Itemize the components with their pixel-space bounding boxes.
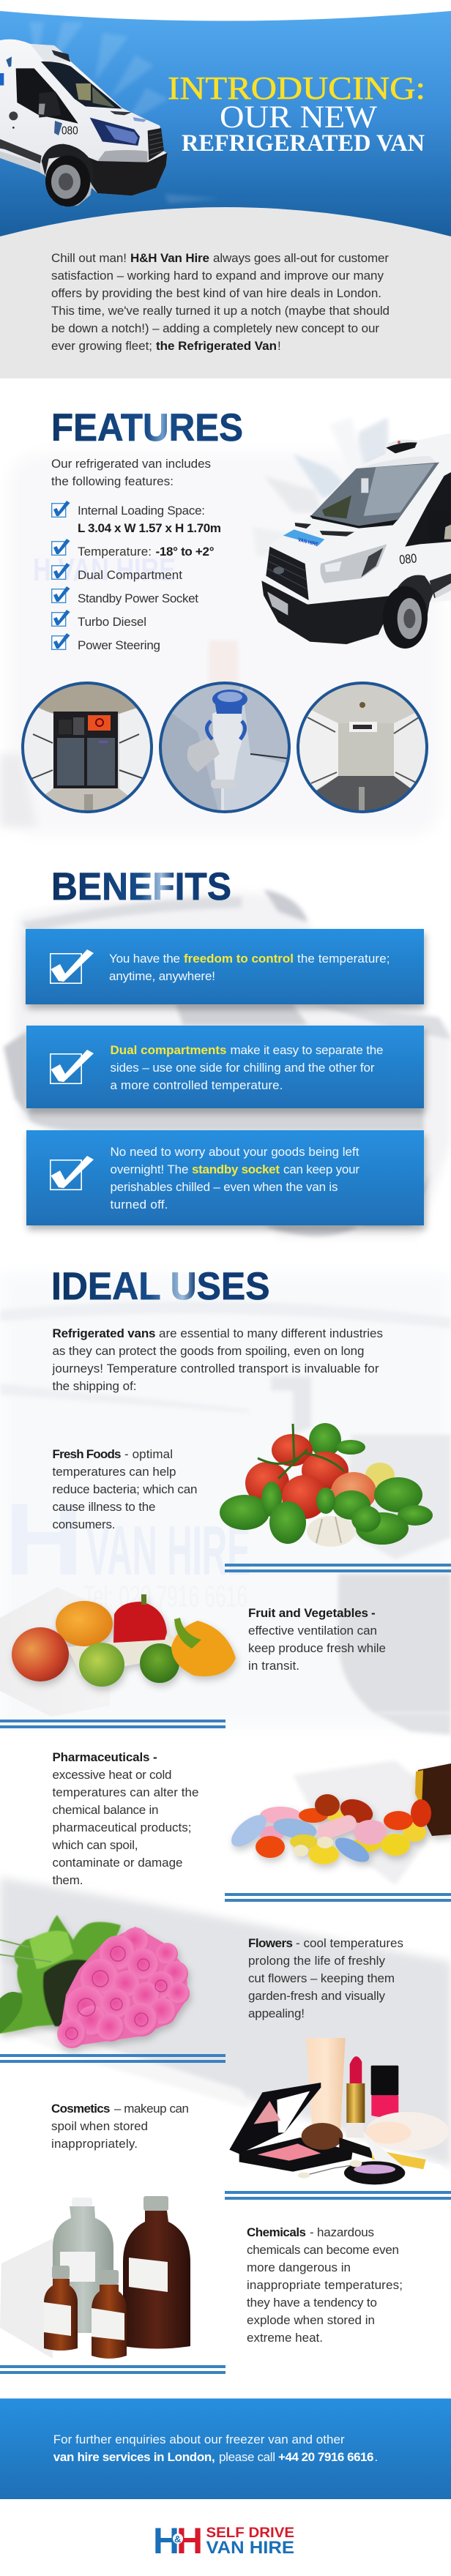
text: chemicals: inappropriate temperatures; [247, 2278, 403, 2292]
van photo [261, 433, 451, 649]
text: chemicals: chemicals can become even [247, 2243, 399, 2257]
text: fresh foods: temperatures can help [53, 1465, 176, 1479]
logo: H&H Self Drive Van Hire [153, 2520, 294, 2561]
text: flowers: appealing! [248, 2006, 305, 2020]
heading: ideal uses: IDEAL USES [51, 1265, 269, 1308]
benefit card 1: the temperature; [297, 952, 390, 966]
header panel [0, 0, 451, 378]
panel: features [22, 406, 451, 816]
title: REFRIGERATED VAN [182, 130, 425, 157]
photo: fruit and peppers [12, 1594, 236, 1687]
text: chemicals: more dangerous in [247, 2260, 351, 2274]
text: pharmaceuticals: which can spoil, [51, 1838, 138, 1852]
text: fresh foods [53, 1447, 198, 1531]
intro text: ! [277, 339, 281, 353]
text: fruit and vegetables: effective ventilation can [248, 1624, 377, 1638]
logo: H&H Self Drive Van Hire: H [176, 2520, 203, 2561]
benefit card 1 [26, 929, 424, 1004]
grey intro panel [0, 207, 451, 378]
background: faint blurred van watermark: Tel: 020 7916 6616 [83, 1579, 247, 1613]
text: flowers: Flowers [248, 1936, 293, 1950]
photo: empty cargo interior [297, 681, 428, 816]
text: fruit and vegetables: - [371, 1606, 376, 1620]
divider lines [0, 2365, 225, 2374]
photo: standby power socket [157, 681, 293, 816]
ideal uses intro text: Refrigerated vans [53, 1326, 155, 1340]
benefit card 3: overnight! The [110, 1162, 189, 1176]
ideal uses intro text: the shipping of: [53, 1379, 136, 1393]
text: fresh foods: Fresh Foods [53, 1447, 122, 1461]
title: OUR NEW [220, 100, 377, 135]
text: cosmetics: Cosmetics [51, 2102, 110, 2116]
photo ring 1 [23, 683, 152, 812]
benefit card 2: Dual compartments [110, 1043, 227, 1057]
benefit card 2 [26, 1026, 424, 1108]
divider lines [0, 1720, 225, 1728]
text: cosmetics: inappropriately. [51, 2137, 138, 2151]
intro text [51, 251, 390, 353]
background: faint blurred van watermark [0, 454, 451, 2359]
benefit card 3 [26, 1130, 424, 1225]
divider lines [225, 1893, 451, 1902]
background: faint blurred van watermark: H VAN HIRE [33, 552, 176, 588]
text: chemicals: extreme heat. [247, 2331, 323, 2345]
photo ring 3 [298, 683, 427, 812]
feature checklist: L 3.04 x W 1.57 x H 1.70m [78, 521, 221, 535]
intro text: always goes all-out for customer [213, 251, 389, 265]
text: cosmetics: spoil when stored [51, 2119, 148, 2133]
ideal uses intro text [51, 1326, 383, 1393]
text: chemicals: - hazardous [310, 2225, 374, 2239]
light rays [29, 22, 220, 245]
text: fresh foods: cause illness to the [53, 1500, 155, 1514]
feature checklist: Power Steering [78, 638, 160, 652]
text: chemicals: they have a tendency to [247, 2296, 377, 2310]
feature checklist: Standby Power Socket [78, 591, 198, 605]
text: pharmaceuticals: Pharmaceuticals [53, 1750, 149, 1764]
footer call-to-action band: For further enquiries about our freezer van and other [53, 2433, 345, 2446]
text: fresh foods: reduce bacteria; which can [53, 1482, 198, 1496]
intro text: offers by providing the best kind of van hire deals in London. [51, 286, 381, 300]
text: pharmaceuticals: excessive heat or cold [53, 1768, 171, 1782]
text: cosmetics: – makeup can [114, 2102, 189, 2116]
text: pharmaceuticals: chemical balance in [53, 1803, 158, 1817]
logo: H&H Self Drive Van Hire: & [174, 2534, 181, 2545]
logo: H&H Self Drive Van Hire: SELF DRIVE [206, 2525, 294, 2541]
benefit card 1: You have the [109, 952, 180, 966]
text: flowers [248, 1936, 403, 2020]
text: pharmaceuticals: them. [53, 1873, 83, 1887]
benefit card 1: freedom to control [184, 952, 294, 966]
text: fruit and vegetables: Fruit and Vegetables [248, 1606, 368, 1620]
heading: features: FEATURES [51, 406, 243, 449]
intro text: be down a notch!) – adding a completely new concept to our [51, 321, 379, 335]
footer call-to-action band: . [375, 2450, 378, 2464]
van photo [0, 40, 168, 206]
panel: ideal uses [0, 1265, 451, 2374]
text: chemicals: explode when stored in [247, 2313, 375, 2327]
van photo: VAN HIRE [297, 537, 319, 548]
divider lines [225, 2191, 451, 2200]
intro text: This time, we've really turned it up a notch (maybe that should [51, 304, 390, 318]
ideal uses intro text: as they can protect the goods from spoiling, even on long [53, 1344, 365, 1358]
intro text: satisfaction – working hard to expand and improve our many [51, 269, 384, 283]
icon: checkbox [51, 1156, 94, 1190]
background: faint blurred van watermark: VAN HIRE [86, 1512, 250, 1590]
text: fruit and vegetables: in transit. [248, 1659, 299, 1673]
feature checklist [52, 501, 221, 652]
photo: cosmetics [229, 2038, 449, 2189]
panel: benefits [26, 865, 424, 1225]
benefit card 2: a more controlled temperature. [110, 1078, 283, 1092]
feature checklist: Turbo Diesel [78, 615, 146, 629]
footer call-to-action band: +44 20 7916 6616 [278, 2450, 373, 2464]
photo ring 2 [160, 683, 289, 812]
ideal uses intro text: journeys! Temperature controlled transport is invaluable for [51, 1362, 379, 1375]
icon: checkbox [51, 1050, 94, 1083]
features intro text: Our refrigerated van includes [51, 457, 211, 471]
feature checklist: Temperature: [78, 545, 152, 559]
benefit card 2: make it easy to separate the [230, 1043, 384, 1057]
benefit card 3: perishables chilled – even when the van is [110, 1180, 338, 1194]
ideal uses intro text: are essential to many different industries [159, 1326, 383, 1340]
photo: tomatoes and basil [220, 1423, 433, 1547]
icon: checkbox [51, 949, 94, 983]
benefit card 3: turned off. [110, 1198, 168, 1212]
intro text: H&H Van Hire [130, 251, 209, 265]
heading: benefits: BENEFITS [51, 865, 231, 908]
photo: dual compartment interior [22, 681, 154, 816]
benefit card 1: anytime, anywhere! [109, 969, 215, 983]
divider lines [225, 1564, 451, 1572]
features intro text: the following features: [51, 474, 174, 488]
text: flowers: cut flowers – keeping them [248, 1971, 395, 1985]
text: flowers: - cool temperatures [296, 1936, 403, 1950]
text: cosmetics [51, 2102, 189, 2151]
benefit card 2: sides – use one side for chilling and the other for [110, 1061, 375, 1075]
logo: H&H Self Drive Van Hire: VAN HIRE [206, 2538, 294, 2558]
title [168, 70, 425, 157]
benefit card 3: standby socket [192, 1162, 280, 1176]
feature checklist: Internal Loading Space: [78, 504, 205, 518]
title: INTRODUCING: [168, 70, 425, 106]
text: pharmaceuticals: - [153, 1750, 157, 1764]
text: pharmaceuticals: contaminate or damage [53, 1856, 183, 1870]
van photo: 080 [398, 550, 417, 567]
footer call-to-action band: please call [219, 2450, 275, 2464]
feature checklist: Dual Compartment [78, 568, 182, 582]
text: flowers: prolong the life of freshly [248, 1954, 385, 1968]
text: pharmaceuticals: temperatures can alter the [53, 1785, 199, 1799]
logo: H&H Self Drive Van Hire: H [153, 2520, 179, 2561]
text: fruit and vegetables [248, 1606, 386, 1673]
van photo: 080 [61, 124, 78, 137]
features intro text [51, 457, 211, 488]
text: fruit and vegetables: keep produce fresh while [248, 1641, 386, 1655]
text: pharmaceuticals [51, 1750, 199, 1887]
text: pharmaceuticals: pharmaceutical products; [53, 1821, 192, 1834]
text: fresh foods: - optimal [124, 1447, 173, 1461]
intro text: ever growing fleet; [51, 339, 152, 353]
text: chemicals [247, 2225, 403, 2345]
feature checklist: -18° to +2° [155, 545, 215, 559]
van rays [253, 417, 388, 556]
text: chemicals: Chemicals [247, 2225, 306, 2239]
footer call-to-action band [0, 2398, 451, 2499]
top white curve [0, 0, 451, 20]
footer call-to-action band: van hire services in London, [53, 2450, 215, 2464]
divider lines [0, 2054, 225, 2063]
photo: pink roses bouquet [0, 1915, 190, 2048]
intro text: the Refrigerated Van [156, 339, 277, 353]
photo: pills and bottle [226, 1763, 451, 1867]
text: fresh foods: consumers. [53, 1517, 116, 1531]
background: faint blurred van watermark: H [4, 1482, 83, 1597]
intro text: Chill out man! [51, 251, 127, 265]
photo: chemical bottles [44, 2196, 190, 2359]
blue header background [0, 7, 451, 249]
benefit card 3: No need to worry about your goods being left [110, 1145, 359, 1159]
text: flowers: garden-fresh and visually [248, 1989, 385, 2003]
benefit card 3: can keep your [283, 1162, 359, 1176]
